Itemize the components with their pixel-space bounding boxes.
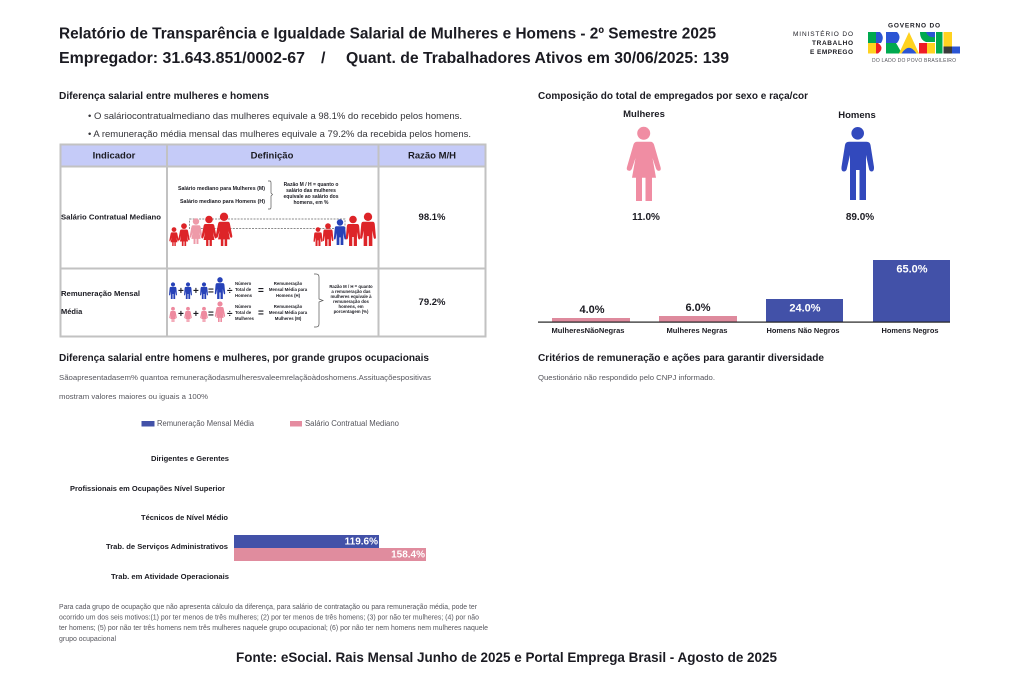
bar: mulheres não negras: MulheresNãoNegras — [552, 326, 624, 335]
diagram: average pay: Mulheres (M) — [275, 316, 302, 321]
title: Relatório de Transparência e Igualdade Salarial de Mulheres e Homens - 2º Semestre 2025 — [59, 26, 716, 42]
diagram: median salary: salário das mulheres — [286, 188, 336, 194]
letter S — [919, 32, 935, 54]
bar: remuneração 119.6%: 119.6% — [345, 536, 378, 548]
row: remuneração mensal média: 79.2% — [419, 297, 446, 308]
bar: homens negros: 65.0% — [896, 264, 928, 276]
icon group: homens 89.0% — [838, 110, 876, 223]
table header: Razão M/H — [408, 150, 456, 162]
diagram: median salary: equivale ao salário dos — [283, 194, 339, 200]
diagram: average pay: Remuneração — [274, 304, 303, 309]
row: salário contratual mediano: Salário Contratual Mediano — [61, 212, 161, 222]
logo: governo do brasil — [868, 22, 960, 64]
text block: salary summary bullets: • O saláriocontratualmediano das mulheres equivale a 98.1% do recebido pelos homens. — [88, 111, 462, 122]
bar: mulheres negras: 6.0% — [685, 302, 711, 314]
icon: woman — [627, 127, 661, 201]
diagram: average pay: remuneração dos — [333, 299, 370, 304]
text block: salary summary bullets: • A remuneração média mensal das mulheres equivale a 79.2% da recebida pelos homens. — [88, 129, 471, 140]
diagram: average pay: homens, em — [338, 304, 364, 309]
diagram: average pay: = — [258, 308, 264, 319]
row: remuneração mensal média: Média — [61, 307, 83, 316]
bar: homens não negros — [766, 299, 843, 335]
heading: diferença salarial entre mulheres e homens: Diferença salarial entre mulheres e homens — [59, 90, 269, 102]
letter R — [886, 32, 902, 54]
icon group: homens 89.0%: 89.0% — [846, 212, 874, 223]
category labels: Trab. em Atividade Operacionais — [111, 572, 229, 581]
diagram: median salary: Salário mediano para Mulheres (M) — [178, 186, 265, 192]
bar: homens negros — [873, 260, 950, 335]
category labels — [70, 454, 229, 581]
letter B — [868, 32, 883, 54]
icon group: mulheres 11.0%: Mulheres — [623, 109, 665, 120]
footnote — [59, 604, 488, 643]
diagram: median salary: homens, em % — [293, 200, 329, 206]
diagram: average pay: Total de — [235, 287, 252, 292]
letter I — [936, 32, 942, 54]
bar: mulheres não negras: 4.0% — [579, 304, 605, 316]
legend: Salário Contratual Mediano — [305, 419, 400, 428]
icon group: homens 89.0%: Homens — [838, 110, 876, 121]
panel: indicators table — [60, 144, 486, 337]
footnote: ter homens; (5) por não ter três homens nem três mulheres naquele grupo ocupacional; (6) por não ter nem homens nem mulheres naquele — [59, 625, 488, 632]
heading: critérios de remuneração: Critérios de remuneração e ações para garantir diversidade — [538, 352, 824, 364]
heading: composição do total: Composição do total de empregados por sexo e raça/cor — [538, 90, 808, 102]
diagram: median salary: Razão M / H = quanto o — [284, 182, 338, 188]
diagram: average pay: Número — [235, 281, 252, 286]
bar: homens não negros: Homens Não Negros — [766, 326, 840, 335]
diagram: average pay: + — [193, 309, 199, 320]
text block: chart description — [59, 373, 431, 401]
table header: Definição — [251, 150, 294, 162]
row: remuneração mensal média: Remuneração Mensal — [61, 289, 140, 298]
bar chart: occupational groups — [70, 454, 426, 581]
letter L — [944, 32, 960, 54]
legend — [142, 419, 400, 428]
bar: homens negros: Homens Negros — [882, 326, 938, 335]
bar: salário 158.4%: 158.4% — [391, 550, 425, 560]
text block: chart description: mostram valores maiores ou iguais a 100% — [59, 392, 208, 401]
icon group: mulheres 11.0%: 11.0% — [632, 212, 660, 223]
footnote: ocorrido um dos seis motivos:(1) por ter menos de três mulheres; (2) por ter menos de três homens; (3) por não ter mulheres; (4) por não — [59, 614, 479, 622]
title — [59, 26, 729, 67]
diagram: median salary — [169, 181, 376, 246]
logo: ministério do trabalho e emprego: E EMPREGO — [810, 49, 853, 56]
text block: questionário: Questionário não respondido pelo CNPJ informado. — [538, 373, 715, 382]
diagram: average pay: Homens (H) — [276, 293, 301, 298]
diagram: average pay: = — [258, 286, 264, 296]
text block: chart description: Sãoapresentadasem% quantoa remuneraçãodasmulheresvaleemrelaçãoàdoshomens.Assituaçõespositivas — [59, 373, 431, 382]
source line: Fonte: eSocial. Rais Mensal Junho de 2025 e Portal Emprega Brasil - Agosto de 2025 — [236, 649, 777, 665]
bar: homens não negros: 24.0% — [789, 302, 821, 314]
text block: salary summary bullets — [88, 111, 471, 140]
diagram: average pay: a remuneração das — [331, 289, 371, 294]
diagram: median salary: Salário mediano para Homens (H) — [180, 199, 265, 205]
logo: governo do brasil: DO LADO DO POVO BRASILEIRO — [872, 58, 956, 64]
diagram: average pay: + — [178, 286, 184, 297]
logo: ministério do trabalho e emprego: TRABALHO — [812, 40, 853, 47]
logo: ministério do trabalho e emprego — [793, 29, 853, 56]
row: remuneração mensal média — [61, 274, 446, 327]
footnote: grupo ocupacional — [59, 636, 116, 643]
table header: Indicador — [93, 150, 136, 162]
icon group: mulheres 11.0% — [623, 109, 665, 223]
diagram: average pay: Remuneração — [274, 281, 303, 286]
diagram: average pay: Mensal Média para — [269, 287, 308, 292]
title: / — [321, 50, 326, 67]
legend: Remuneração Mensal Média — [157, 419, 255, 428]
title: Empregador: 31.643.851/0002-67 — [59, 50, 305, 67]
table header — [60, 144, 486, 166]
diagram: average pay: Número — [235, 304, 252, 309]
bar: remuneração 119.6% — [234, 535, 379, 548]
icon: man — [841, 127, 874, 200]
diagram: average pay: Razão M / H = quanto — [329, 284, 373, 289]
category labels: Profissionais em Ocupações Nível Superior — [70, 484, 225, 493]
logo: ministério do trabalho e emprego: MINISTÉRIO DO — [793, 29, 853, 38]
diagram: average pay: Total de — [235, 310, 252, 315]
diagram: average pay: + — [193, 286, 199, 297]
row: salário contratual mediano: 98.1% — [419, 212, 446, 223]
diagram: average pay: mulheres equivale à — [330, 294, 372, 299]
heading: diferença salarial por grupos ocupacionais: Diferença salarial entre homens e mulheres, por grande grupos ocupacionais — [59, 352, 429, 364]
diagram: average pay: Homens — [235, 293, 253, 298]
bar chart: composition by sex and race — [538, 260, 950, 335]
diagram: average pay: ÷ — [227, 286, 233, 297]
logo: governo do brasil: GOVERNO DO — [888, 22, 940, 30]
bar: mulheres negras — [659, 302, 737, 335]
bar: mulheres não negras — [552, 304, 630, 335]
letter A — [899, 32, 919, 54]
title: Quant. de Trabalhadores Ativos em 30/06/2025: 139 — [346, 50, 729, 67]
diagram: average pay: ÷ — [227, 309, 233, 320]
diagram: average pay: Mensal Média para — [269, 310, 308, 315]
category labels: Trab. de Serviços Administrativos — [106, 542, 228, 551]
diagram: average pay: + — [178, 309, 184, 320]
diagram: average pay: = — [208, 286, 214, 297]
category labels: Técnicos de Nível Médio — [141, 513, 228, 522]
bar: salário 158.4% — [234, 548, 426, 561]
diagram: average pay: Mulheres — [235, 316, 254, 321]
diagram: average pay: porcentagem (%) — [334, 309, 369, 314]
diagram: average pay: = — [208, 309, 214, 320]
footnote: Para cada grupo de ocupação que não apresenta cálculo da diferença, para salário de contratação ou para remuneração média, pode ter — [59, 604, 478, 611]
diagram: average pay — [169, 274, 373, 327]
bar: mulheres negras: Mulheres Negras — [666, 326, 728, 335]
category labels: Dirigentes e Gerentes — [151, 454, 229, 463]
row: salário contratual mediano — [61, 181, 446, 246]
